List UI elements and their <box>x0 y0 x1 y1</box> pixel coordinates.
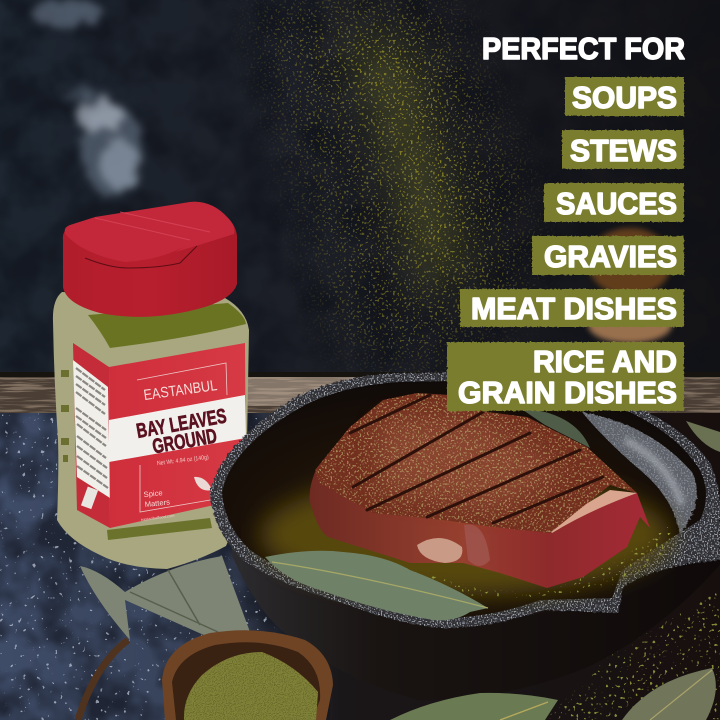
brand frame <box>137 363 227 512</box>
product name: GROUND <box>151 424 219 458</box>
heading: PERFECT FOR <box>482 31 685 66</box>
cast iron pan <box>210 372 720 700</box>
grill marks <box>350 395 603 523</box>
jar body <box>53 292 249 569</box>
right table leaf <box>686 421 720 452</box>
powder band on shoulder <box>88 303 246 348</box>
banner: meat dishes: MEAT DISHES <box>471 291 677 326</box>
nutrition panel <box>73 360 110 509</box>
leaf behind steak <box>520 408 590 448</box>
spice dust cloud <box>230 0 560 378</box>
tagline: Spice <box>143 488 163 499</box>
oil <box>260 475 670 595</box>
small leaf <box>194 477 212 490</box>
jar: Bay Leaves Ground <box>53 202 249 569</box>
banner: stews: STEWS <box>570 133 677 168</box>
white band <box>109 395 246 462</box>
banner: sauces: SAUCES <box>556 186 677 221</box>
table surface <box>0 413 720 720</box>
banner: gravies: GRAVIES <box>544 239 677 274</box>
product name: BAY LEAVES <box>135 404 228 443</box>
seasoning on steak <box>315 393 637 533</box>
interior highlight <box>582 412 697 535</box>
banner: rice and grain dishes: RICE AND <box>533 344 677 379</box>
steak side <box>310 470 650 588</box>
leaves under jar on table <box>78 556 250 720</box>
tagline <box>143 487 171 509</box>
bottom bay leaf <box>390 693 558 720</box>
label front <box>109 343 246 528</box>
label side panel <box>73 343 110 528</box>
banner: soups: SOUPS <box>572 80 677 115</box>
net weight: Net Wt: 4.94 oz (140g) <box>157 455 209 467</box>
pan rim <box>210 372 720 628</box>
bay leaf in pan <box>265 551 488 620</box>
steak <box>310 393 650 588</box>
wooden shelf <box>0 372 720 418</box>
jar cap <box>63 202 237 317</box>
banner: rice and grain dishes: GRAIN DISHES <box>458 375 677 410</box>
bowl of ground bay leaves <box>162 630 333 720</box>
website: eastanbulfood.com <box>141 513 175 522</box>
background: dark wall <box>0 0 720 378</box>
bottom right bay leaf <box>622 668 716 720</box>
pan interior <box>222 380 706 618</box>
steak top <box>315 393 637 533</box>
pan body <box>232 530 720 700</box>
tagline: Matters <box>144 497 171 509</box>
brand name: EASTANBUL <box>143 377 218 404</box>
product name <box>135 404 231 461</box>
banner: rice and grain dishes <box>447 342 684 411</box>
